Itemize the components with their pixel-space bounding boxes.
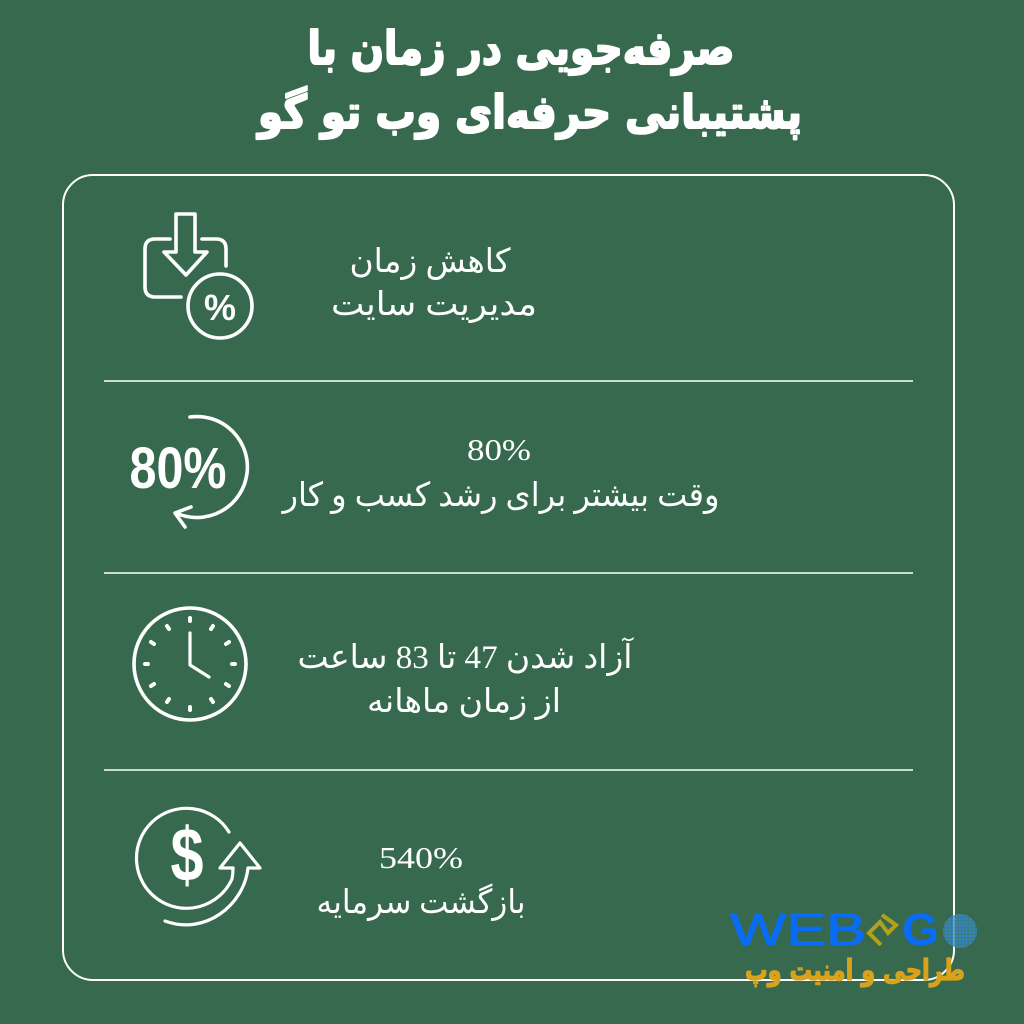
icon: clock bbox=[134, 608, 246, 720]
text: 80 percent more time for business growth bbox=[281, 432, 720, 514]
text: 540 percent return on investment: 540% bbox=[379, 840, 463, 875]
title: پشتیبانی حرفه‌ای وب تو گو bbox=[256, 85, 802, 140]
logo: WEBGO: طراحی و امنیت وپ bbox=[745, 953, 965, 987]
logo: WEBGO: G bbox=[902, 904, 939, 955]
text: reduce site management time: کاهش زمان bbox=[350, 244, 511, 280]
text: freeing 47 to 83 hours monthly bbox=[298, 637, 634, 720]
logo: WEBGO: WEB bbox=[730, 904, 866, 955]
icon: dollar with return arrow bbox=[136, 808, 260, 925]
text: 80 percent more time for business growth: 80% bbox=[467, 432, 531, 467]
title bbox=[256, 21, 802, 140]
text: 80 percent more time for business growth: وقت بیشتر برای رشد کسب و کار bbox=[281, 478, 720, 514]
icon: 80 percent with circular arrow bbox=[130, 417, 247, 527]
logo: WEBGO bbox=[730, 904, 977, 987]
text: freeing 47 to 83 hours monthly: آزاد شدن 47 تا 83 ساعت bbox=[298, 637, 634, 676]
title: صرفه‌جویی در زمان با bbox=[308, 21, 734, 75]
icon: download with percent bbox=[145, 214, 252, 338]
text: reduce site management time bbox=[331, 244, 537, 323]
icon: dollar with return arrow: $ bbox=[170, 813, 204, 898]
text: 540 percent return on investment bbox=[316, 840, 526, 921]
text: reduce site management time: مدیریت سایت bbox=[331, 287, 537, 323]
panel: benefits card bbox=[63, 175, 954, 980]
text: 540 percent return on investment: بازگشت سرمایه bbox=[316, 883, 526, 921]
icon: download with percent: % bbox=[204, 287, 236, 328]
icon: 80 percent with circular arrow: 80% bbox=[130, 436, 226, 501]
text: freeing 47 to 83 hours monthly: از زمان ماهانه bbox=[367, 684, 561, 720]
